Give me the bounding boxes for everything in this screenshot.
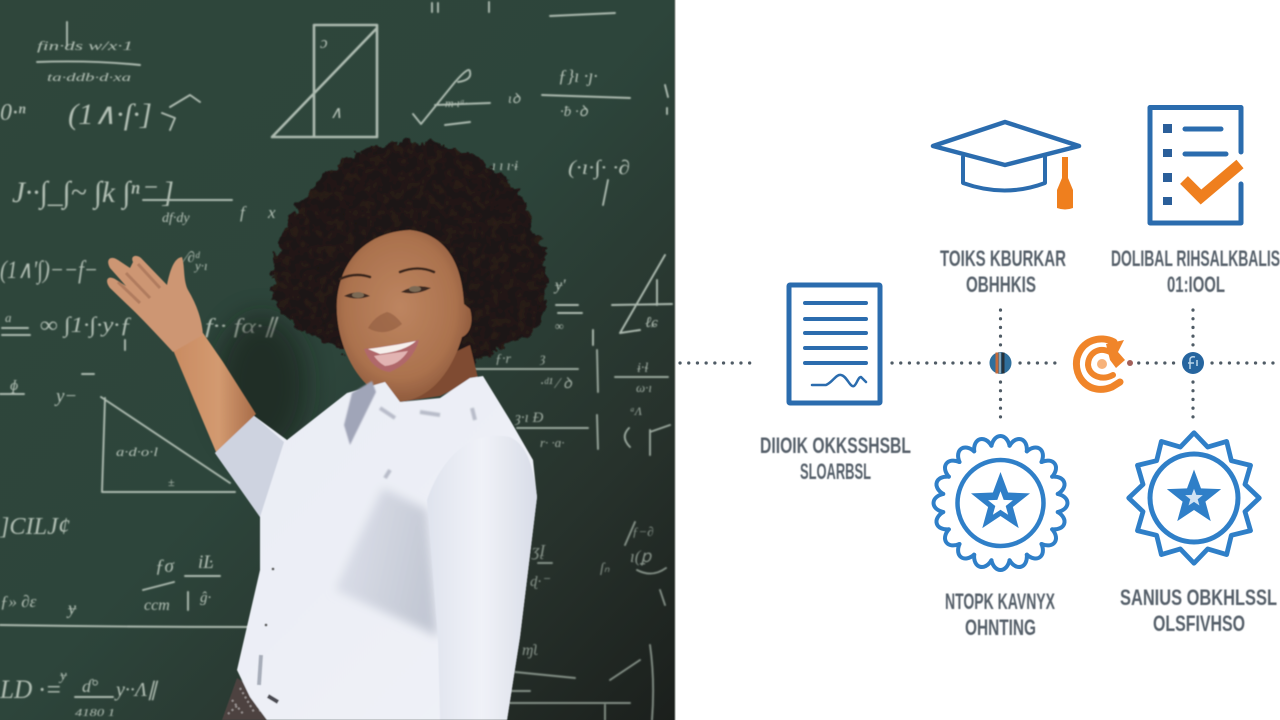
label: gear badge — [945, 589, 1055, 640]
chalk: lower right marks: ƒ−∂ — [632, 524, 654, 539]
chalk: bottom row: y··Λ∥ — [114, 679, 159, 701]
photo right edge — [674, 0, 676, 720]
chalk: triangle in rectangle: ∧ — [330, 103, 342, 122]
chalk: triangle in rectangle: ɔ — [320, 33, 328, 52]
chalk: long fraction row: J··∫_∫~ ∫k ∫ⁿ⁻ ] — [12, 176, 174, 211]
chalk: row near hand: ∕∂ᵈ — [182, 250, 201, 266]
chalk: bottom row: ɗ° — [82, 676, 98, 696]
label: cap: OBHHKIS — [966, 272, 1036, 297]
nose — [368, 312, 402, 332]
chalk: right fractions: ȝ — [539, 351, 546, 366]
hair — [272, 142, 548, 390]
chalk: row below hand: f·· fα·∥ — [205, 314, 279, 338]
dotted connector lines — [680, 310, 1280, 418]
chalk: lower left formulas: ĝ· — [200, 590, 211, 606]
label: gear badge: OHNTING — [965, 615, 1036, 640]
chalk: row near hand: y·ı — [193, 258, 208, 273]
mouth — [364, 340, 419, 372]
chalk: long fraction row: x — [267, 203, 276, 222]
node: right junction — [1182, 352, 1204, 374]
chalk: right fractions: ȝ·ı Ɖ — [514, 410, 544, 426]
chalk: bottom row: ɏ — [58, 668, 68, 684]
collar pattern — [344, 381, 376, 445]
chalk: bottom row — [0, 668, 159, 719]
chalk: second row formula — [0, 95, 200, 131]
label: cap: TOIKS KBURKAR — [940, 246, 1066, 271]
chalk: upper right equations: (·ı·∫· ·∂ — [568, 157, 630, 180]
chalk: upper right equations: ƒ}ı ·ȷ· — [558, 66, 598, 86]
skirt — [222, 678, 441, 720]
chalk: row below hand — [2, 310, 279, 350]
chalk: right fractions: ᵃΛ — [630, 404, 643, 418]
eyebrows — [340, 268, 434, 279]
shirt sleeve right — [427, 436, 537, 720]
raised forearm — [173, 333, 256, 452]
chalk: row below hand: a — [5, 310, 12, 325]
chalk: lower left triangle: y− — [54, 386, 77, 407]
chalk: lower right marks: ʒĮ — [530, 541, 547, 560]
chest shading — [335, 488, 438, 637]
chalk: upper right equations: ı ı ı·ɨ — [492, 159, 518, 174]
raised hand — [107, 256, 203, 352]
chalk: long fraction row: df·dy — [162, 211, 190, 226]
chalk: right fractions: ω·ı — [636, 380, 652, 395]
arm shadow on the board — [216, 315, 308, 455]
chalk: lower left formulas: ƒσ — [155, 556, 174, 577]
label: starburst badge: OLSFIVHSO — [1153, 611, 1245, 636]
chalk: top left fraction: ta·ddb·d·xa — [47, 70, 131, 84]
chalk: lower right marks: ſₙ — [600, 561, 610, 576]
chalk: lower left formulas — [0, 514, 250, 627]
chalk: bottom row: LD ·= — [0, 675, 62, 704]
chalk: long fraction row — [12, 176, 276, 226]
label: checklist — [1111, 246, 1280, 297]
eyes — [344, 286, 431, 298]
chalk: right fractions: ɨ·ɬ — [637, 361, 648, 376]
label: document: DIIOIK OKKSSHSBL — [760, 433, 911, 458]
icon: graduation cap — [933, 122, 1079, 210]
chalk: lower left formulas: ccm — [144, 597, 170, 614]
chalk: upper right equations — [413, 2, 668, 205]
chalk: bottom row: 4180 1 — [75, 707, 115, 719]
label: gear badge: NTOPK KAVNYX — [945, 589, 1055, 614]
node: left junction — [990, 352, 1012, 374]
chalk: right triangle sketch: ℓɕ — [645, 315, 658, 331]
chalk: upper right equations: ιꝺ — [508, 92, 521, 107]
chalk: lower left formulas: ]CILJ¢ — [0, 514, 70, 540]
chalk: lower left triangle: a·d·o·l — [116, 444, 158, 459]
chalk: lower left triangle: ɸ — [10, 378, 18, 394]
chalk: right triangle sketch: ∞ — [555, 319, 564, 333]
neck — [385, 345, 478, 402]
chalk: right triangle sketch — [553, 255, 672, 345]
chalk: second row formula: (1∧·ſ·] — [68, 98, 152, 131]
chalk: right triangle sketch: ɏ' — [553, 277, 566, 294]
icon: gear badge with star — [934, 436, 1067, 570]
chalk: long fraction row: f — [240, 203, 247, 222]
chalk equations and diagrams — [0, 2, 672, 720]
chalk: upper right equations: m·ıᵃ· — [445, 96, 468, 110]
chalkboard background — [0, 0, 675, 720]
chalk: upper right equations: ·ƀ ·ꝺ — [560, 104, 589, 120]
icon: starburst badge with star — [1129, 433, 1259, 563]
chalk: row near hand: (1∧'∫)−−f− — [0, 257, 98, 285]
icon: checklist — [1150, 108, 1241, 223]
chalk: lower left triangle: ± — [168, 475, 175, 489]
teacher figure — [107, 142, 548, 720]
photo panel: teacher at chalkboard — [0, 0, 676, 720]
chalk: top left fraction — [37, 22, 140, 84]
label: starburst badge — [1120, 585, 1277, 636]
chalk: second row formula: 0·ⁿ — [0, 100, 26, 126]
label: cap — [940, 246, 1066, 297]
chalk: row near hand — [0, 250, 208, 285]
chalk: lower left triangle — [0, 374, 235, 492]
face — [337, 230, 472, 402]
chalk: right fractions: r· ·ɑ· — [540, 435, 565, 450]
chalk: triangle in rectangle — [272, 25, 377, 137]
chalk: right fractions: ƒ·r — [495, 352, 512, 367]
chalk: row below hand: ∞ ∫1·∫·y·ƒ — [40, 312, 132, 338]
icon: orange swirl — [1076, 339, 1133, 389]
chalk: lower left formulas: іĿ — [198, 552, 214, 573]
raised sleeve — [215, 415, 284, 517]
chalk: right fractions: ·ᵈ¹ ∕ ꝺ — [540, 376, 573, 392]
chalk: lower left formulas: ƒ» ∂ɛ — [0, 592, 37, 611]
label: checklist: 01:IOOL — [1167, 272, 1225, 297]
chalk: top left fraction: fin·ds w/x·1 — [37, 38, 133, 53]
chalk: lower right marks: ɖ·⁻ — [530, 574, 550, 590]
label: document: SLOARBSL — [800, 459, 871, 484]
chalk: lower right marks: ı(ꝑ — [630, 547, 652, 566]
chalk: lower left formulas: ɏ — [66, 598, 77, 618]
label: document — [760, 433, 911, 484]
icon: document — [789, 285, 880, 403]
chalk: lower right marks — [510, 522, 666, 720]
chalk: right fractions — [473, 350, 670, 455]
shirt torso — [215, 376, 537, 720]
chalk: lower right marks: ɱʅ — [522, 642, 538, 659]
